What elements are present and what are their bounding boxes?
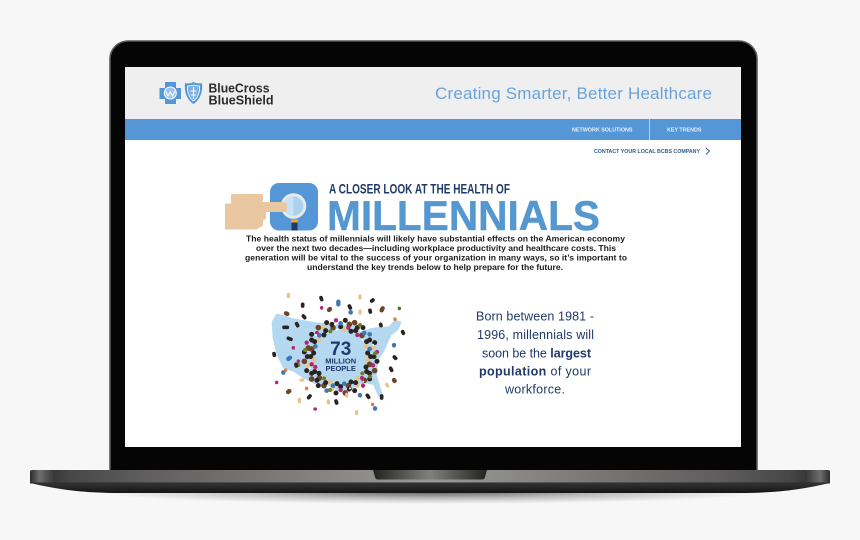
screen [125, 67, 741, 447]
site header band [125, 67, 741, 119]
magnifier tile [270, 183, 318, 230]
icon: hand pointing at magnifying glass [225, 183, 318, 230]
scattered people [274, 298, 403, 403]
US map [272, 313, 402, 397]
text block: born between: population of your [479, 364, 591, 378]
logo wordmark [208, 82, 274, 108]
chart: US map with ring of people [272, 294, 403, 414]
intro paragraph [245, 234, 627, 272]
center circle [312, 328, 370, 386]
laptop lid bezel [110, 41, 757, 471]
people count [325, 339, 356, 373]
text block: born between: Born between 1981 - [476, 310, 594, 324]
heading: a closer look: A CLOSER LOOK AT THE HEALTH OF [329, 182, 510, 196]
people count: 73 [330, 339, 351, 360]
magnifier handle [291, 220, 298, 222]
intro paragraph: The health status of millennials will likely have substantial effects on the American economy [246, 234, 625, 244]
magnifier lens [281, 193, 306, 219]
text block: born between [476, 310, 594, 396]
text block: born between: 1996, millennials will [477, 328, 594, 342]
contact link: CONTACT YOUR LOCAL BCBS COMPANY [594, 149, 701, 155]
people count: MILLION [325, 356, 356, 366]
laptop shadow [95, 492, 765, 504]
header tagline: Creating Smarter, Better Healthcare [435, 84, 712, 103]
intro paragraph: over the next two decades—including workplace productivity and healthcare costs. This [256, 243, 616, 253]
nav items: NETWORK SOLUTIONS [572, 128, 633, 134]
nav items [572, 119, 702, 140]
nav items: KEY TRENDS [667, 128, 702, 134]
laptop base [30, 470, 830, 493]
text block: born between: soon be the largest [482, 346, 592, 360]
hand [225, 194, 287, 230]
laptop notch [373, 470, 487, 480]
icon: blue cross [160, 82, 181, 104]
people count: PEOPLE [325, 364, 356, 373]
nav bar [125, 119, 741, 140]
logo wordmark: BlueCross [208, 82, 270, 96]
intro paragraph: understand the key trends below to help prepare for the future. [307, 262, 563, 272]
icon: blue shield [185, 82, 202, 104]
text block: born between: workforce. [504, 382, 565, 396]
crowd of people [274, 294, 403, 414]
logo wordmark: BlueShield [208, 94, 274, 108]
intro paragraph: generation will be vital to the success of your organization in many ways, so it’s important to [245, 252, 627, 262]
heading: millennials: MILLENNIALS [327, 192, 600, 239]
